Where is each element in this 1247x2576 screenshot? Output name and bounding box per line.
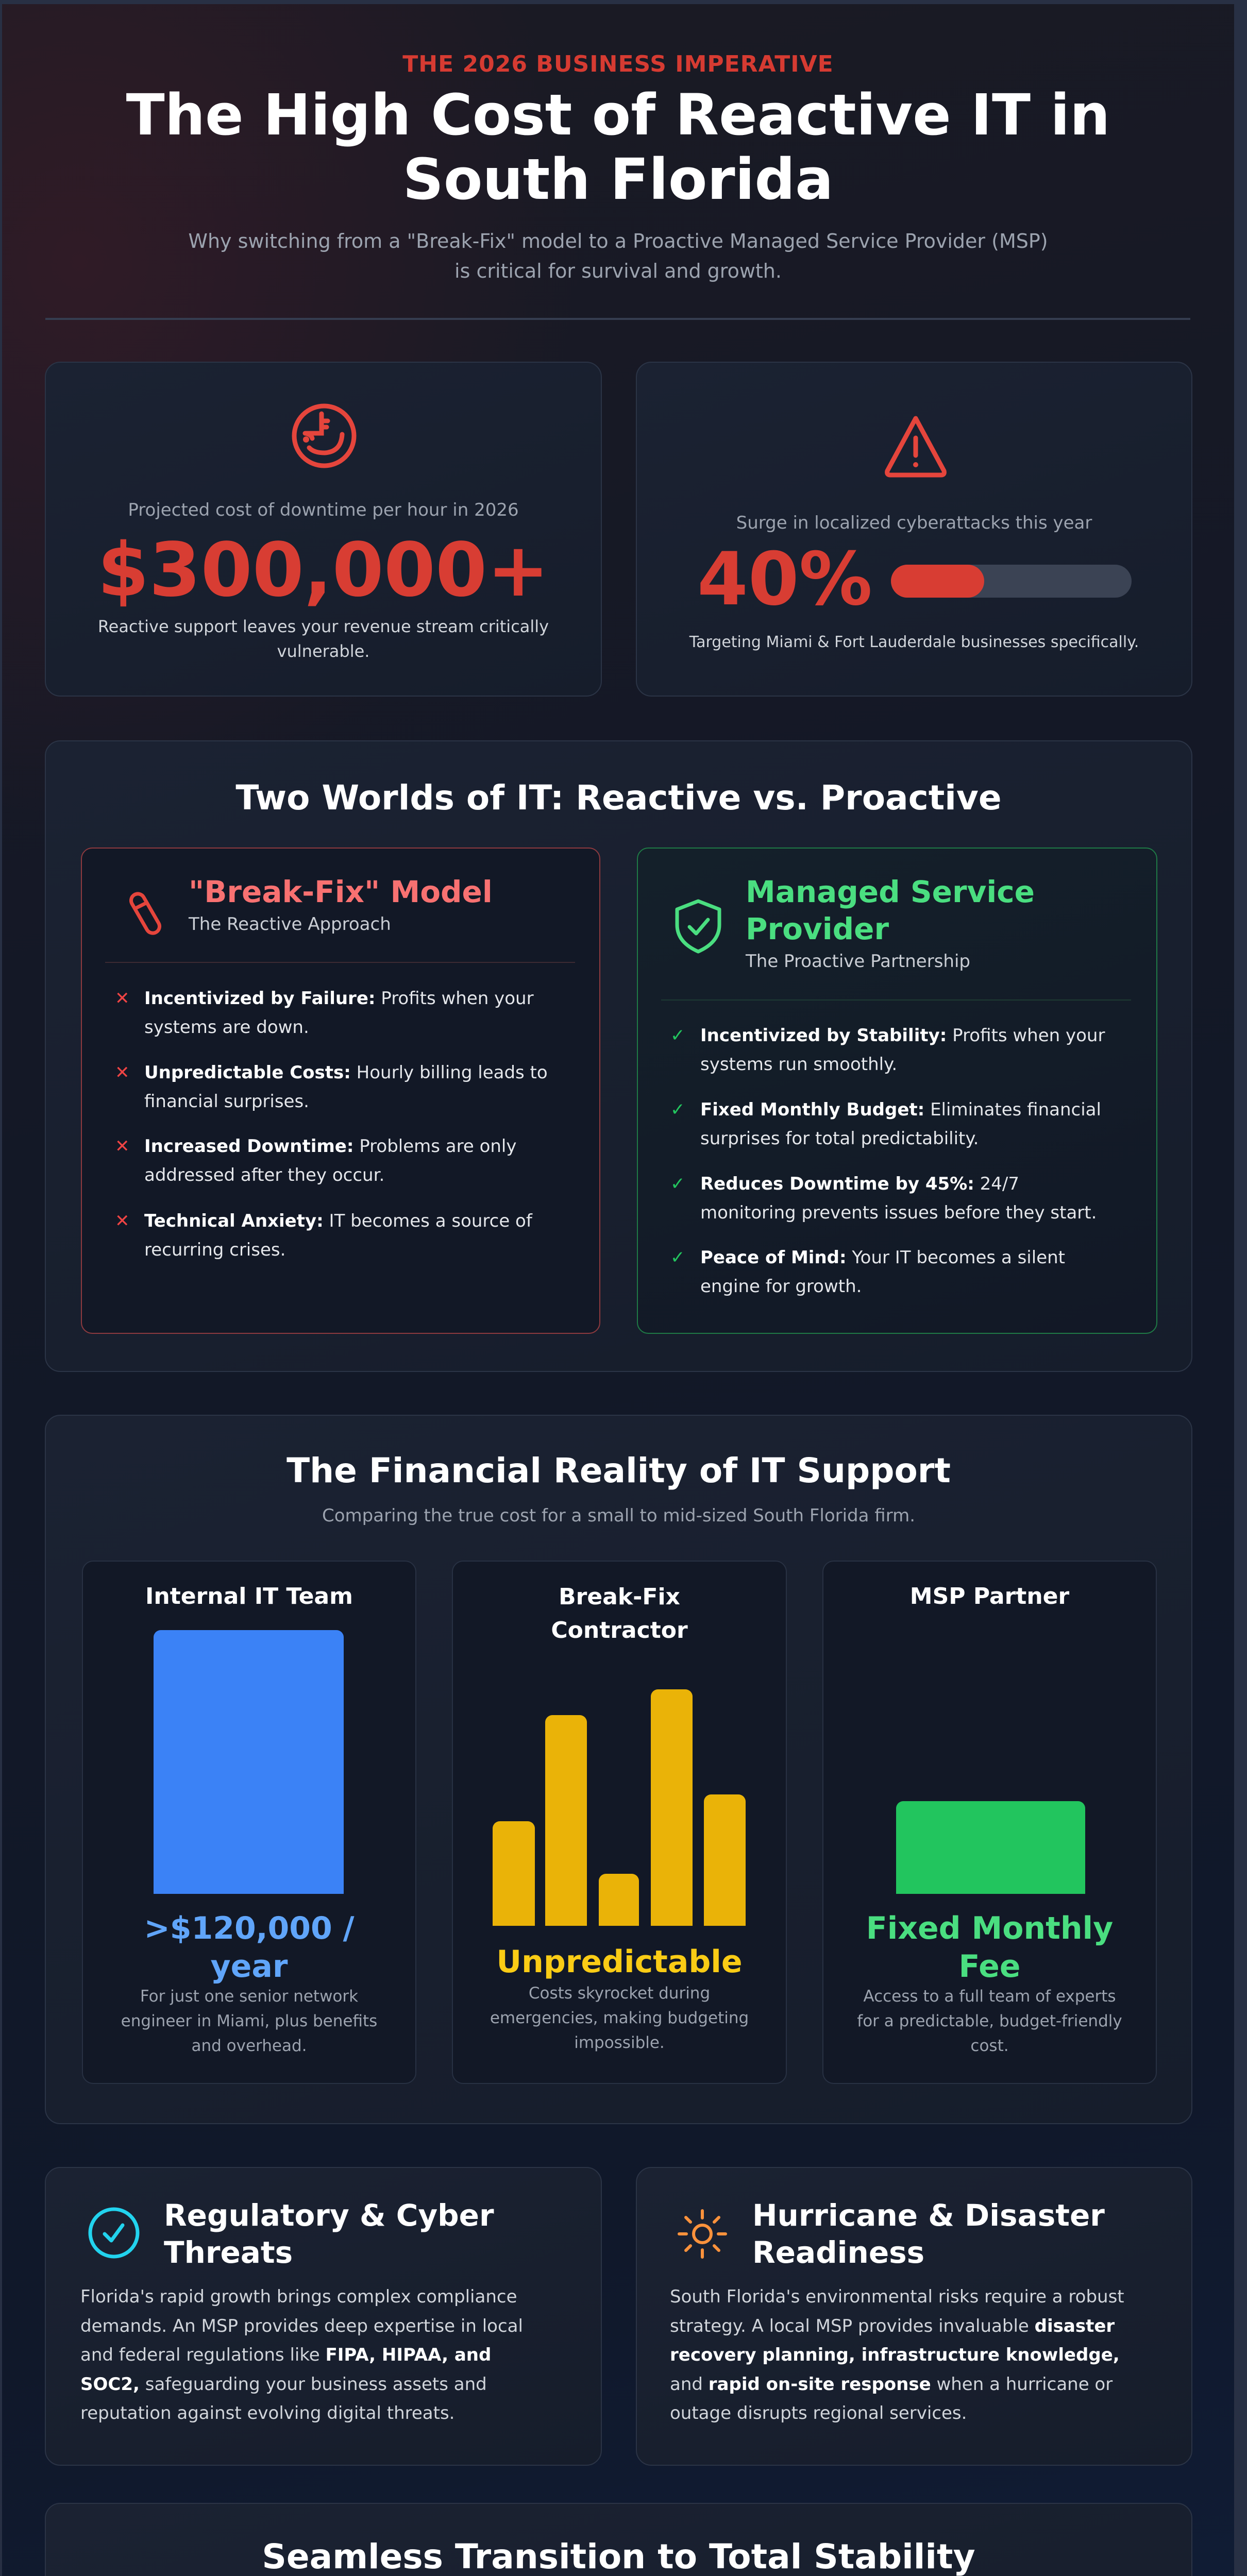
- column: MSP partner: cost.: [970, 2037, 1009, 2055]
- icon: downtime: [292, 404, 357, 468]
- subtitle: is critical for survival and growth.: [454, 260, 782, 282]
- panel: MSP: The Proactive Partnership: [746, 951, 970, 972]
- heading: Seamless Transition to Total Stability: [262, 2537, 975, 2576]
- list: break-fix drawbacks: recurring crises.: [144, 1240, 285, 1260]
- list: break-fix drawbacks: financial surprises.: [144, 1091, 309, 1112]
- list: break-fix drawbacks: Unpredictable Costs: Hourly billing leads to: [144, 1062, 548, 1083]
- list: break-fix drawbacks: ✕: [115, 1136, 130, 1157]
- panel: regulatory threats: demands. An MSP provides deep expertise in local: [80, 2315, 523, 2336]
- column: internal IT: engineer in Miami, plus benefits: [121, 2012, 377, 2030]
- panel: hurricane readiness: South Florida's environmental risks require a robust: [670, 2286, 1124, 2307]
- panel: hurricane readiness: Hurricane & Disaster: [752, 2198, 1105, 2233]
- subtitle: Why switching from a "Break-Fix" model to a Proactive Managed Service Provider (MSP): [188, 230, 1048, 252]
- stat note: Targeting Miami & Fort Lauderdale businesses specifically.: [689, 633, 1139, 651]
- list: break-fix drawbacks: Incentivized by Failure: Profits when your: [144, 988, 534, 1009]
- column: MSP partner: for a predictable, budget-friendly: [857, 2012, 1122, 2030]
- list: MSP benefits: ✓: [670, 1025, 685, 1046]
- panel: downtime cost stat: [45, 362, 602, 697]
- list: break-fix drawbacks: Increased Downtime: Problems are only: [144, 1136, 516, 1157]
- subtitle: [188, 230, 1048, 282]
- stat note: vulnerable.: [277, 641, 369, 661]
- list: MSP benefits: Fixed Monthly Budget: Eliminates financial: [700, 1099, 1101, 1120]
- panel: cyberattack stat: [636, 362, 1192, 697]
- bar: internal: [154, 1630, 344, 1894]
- panel: regulatory threats: and federal regulations like FIPA, HIPAA, and: [80, 2345, 491, 2365]
- panel: regulatory threats: [45, 2167, 602, 2466]
- panel: hurricane readiness: outage disrupts regional services.: [670, 2403, 967, 2424]
- column: MSP partner: Access to a full team of experts: [863, 1987, 1116, 2006]
- list: MSP benefits: monitoring prevents issues before they start.: [700, 1202, 1097, 1223]
- stat note: [98, 617, 549, 661]
- title: "Break-Fix" Model: [189, 874, 493, 909]
- panel: MSP: [637, 848, 1157, 1334]
- panel: regulatory threats: Threats: [164, 2235, 293, 2270]
- panel: break-fix model: [81, 848, 600, 1334]
- bar: MSP: [896, 1801, 1085, 1894]
- stat label: Projected cost of downtime per hour in 2026: [128, 500, 519, 520]
- column: internal IT: >$120,000 /: [144, 1910, 355, 1946]
- list: MSP benefits: [670, 1025, 1105, 1297]
- panel: two worlds: [45, 740, 1192, 1372]
- stat note: Reactive support leaves your revenue stream critically: [98, 617, 549, 636]
- icon: sun: [678, 2209, 727, 2259]
- column: internal IT: and overhead.: [191, 2037, 307, 2055]
- icon: warning: [885, 416, 947, 477]
- title: Provider: [746, 911, 889, 946]
- column: MSP partner: Fixed Monthly: [866, 1910, 1113, 1946]
- list: MSP benefits: ✓: [670, 1099, 685, 1120]
- list: break-fix drawbacks: addressed after they occur.: [144, 1165, 384, 1185]
- panel: regulatory threats: Florida's rapid growth brings complex compliance: [80, 2286, 517, 2307]
- panel: transition steps: [45, 2503, 1192, 2576]
- panel: break-fix model: The Reactive Approach: [189, 914, 391, 935]
- panel: hurricane readiness: Readiness: [752, 2235, 924, 2270]
- stat value: $300,000+: [97, 527, 549, 613]
- list: break-fix drawbacks: ✕: [115, 1211, 130, 1231]
- column: MSP partner: [822, 1561, 1157, 2084]
- panel: hurricane readiness: and rapid on-site response when a hurricane or: [670, 2374, 1113, 2395]
- list: MSP benefits: ✓: [670, 1174, 685, 1194]
- panel: regulatory threats: SOC2, safeguarding your business assets and: [80, 2374, 487, 2395]
- panel: hurricane readiness: [636, 2167, 1192, 2466]
- list: MSP benefits: Peace of Mind: Your IT becomes a silent: [700, 1247, 1065, 1268]
- title: [746, 874, 1035, 946]
- title: South Florida: [403, 146, 833, 212]
- stat label: Surge in localized cyberattacks this year: [736, 513, 1092, 533]
- list: MSP benefits: ✓: [670, 1247, 685, 1268]
- column: break-fix contractor: emergencies, making budgeting: [490, 2009, 749, 2027]
- list: MSP benefits: Reduces Downtime by 45%: 24/7: [700, 1174, 1019, 1194]
- list: break-fix drawbacks: [115, 988, 548, 1260]
- heading: Two Worlds of IT: Reactive vs. Proactive: [235, 778, 1002, 818]
- list: MSP benefits: Incentivized by Stability: Profits when your: [700, 1025, 1105, 1046]
- list: break-fix drawbacks: ✕: [115, 1062, 130, 1083]
- heading: The Financial Reality of IT Support: [287, 1451, 951, 1490]
- column: internal IT: year: [211, 1948, 288, 1985]
- list: MSP benefits: surprises for total predictability.: [700, 1128, 979, 1149]
- progress bar: [891, 565, 1132, 598]
- column: MSP partner: MSP Partner: [910, 1583, 1069, 1609]
- list: MSP benefits: engine for growth.: [700, 1276, 862, 1297]
- title: Managed Service: [746, 874, 1035, 909]
- header eyebrow: THE 2026 BUSINESS IMPERATIVE: [402, 51, 834, 77]
- column: break-fix contractor: [452, 1561, 787, 2084]
- panel: regulatory threats: reputation against evolving digital threats.: [80, 2403, 454, 2424]
- list: break-fix drawbacks: Technical Anxiety: IT becomes a source of: [144, 1211, 532, 1231]
- bar chart: unpredictable: [493, 1689, 746, 1926]
- stat value: 40%: [697, 537, 872, 622]
- title: [126, 82, 1110, 212]
- column: break-fix contractor: Unpredictable: [496, 1944, 743, 1980]
- column: internal IT: [82, 1561, 416, 2084]
- list: MSP benefits: systems run smoothly.: [700, 1054, 897, 1075]
- column: break-fix contractor: impossible.: [574, 2033, 665, 2052]
- column: internal IT: For just one senior network: [140, 1987, 358, 2006]
- panel: financial reality: Comparing the true cost for a small to mid-sized South Florida firm.: [322, 1505, 915, 1526]
- column: internal IT: Internal IT Team: [145, 1583, 353, 1609]
- icon: wrench: [129, 892, 162, 935]
- column: MSP partner: Fee: [959, 1948, 1020, 1985]
- panel: regulatory threats: Regulatory & Cyber: [164, 2198, 494, 2233]
- list: break-fix drawbacks: systems are down.: [144, 1017, 309, 1038]
- column: break-fix contractor: Break-Fix: [559, 1584, 680, 1610]
- panel: hurricane readiness: recovery planning, infrastructure knowledge,: [670, 2345, 1120, 2365]
- title: The High Cost of Reactive IT in: [126, 82, 1110, 148]
- list: break-fix drawbacks: ✕: [115, 988, 130, 1009]
- panel: financial reality: [45, 1415, 1192, 2124]
- panel: hurricane readiness: strategy. A local MSP provides invaluable disaster: [670, 2315, 1115, 2336]
- icon: shield: [675, 900, 721, 953]
- column: break-fix contractor: Costs skyrocket during: [529, 1984, 710, 2003]
- icon: check circle: [89, 2207, 139, 2259]
- column: break-fix contractor: Contractor: [551, 1617, 688, 1643]
